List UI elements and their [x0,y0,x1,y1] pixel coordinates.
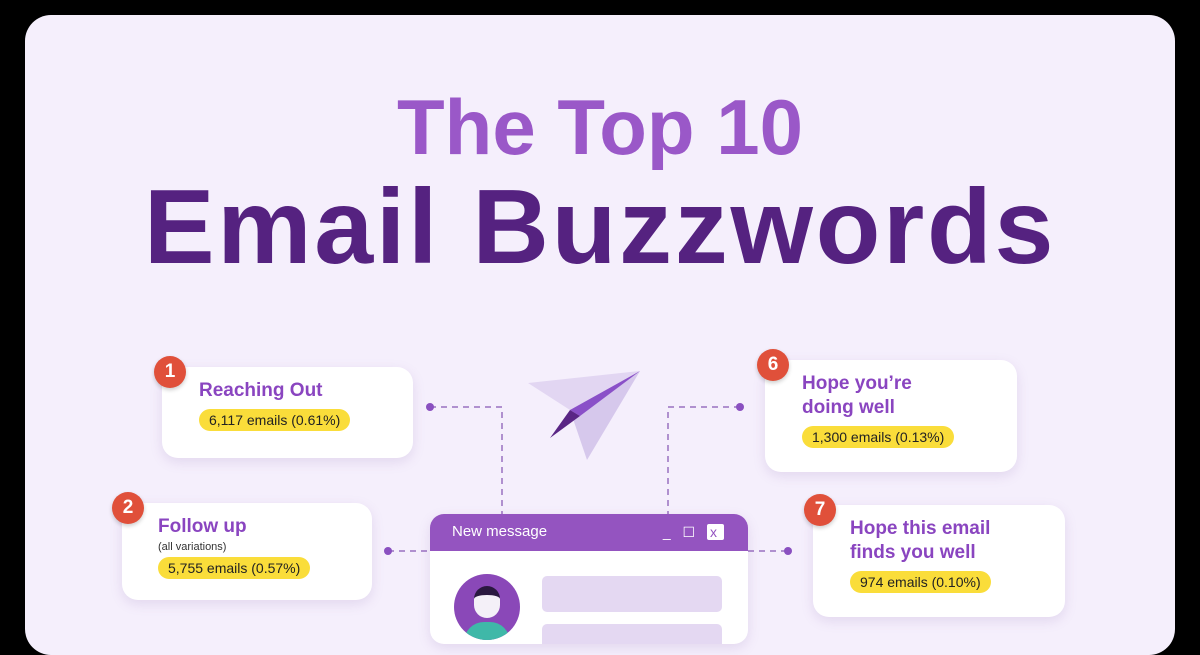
new message window: _ ☐ x [663,524,721,540]
item 7: Hope this email [850,518,990,539]
item 1: Reaching Out [199,380,323,401]
item 2: (all variations) [158,541,226,553]
item 6: 1,300 emails (0.13%) [812,429,944,445]
avatar [454,574,520,640]
badge 6: 6 [768,354,778,375]
item 2: 5,755 emails (0.57%) [168,560,300,576]
item 6: Hope you’re [802,373,912,394]
item 6: doing well [802,397,895,418]
badge 1 [154,356,186,388]
item 7 [813,505,1065,617]
badge 1: 1 [165,361,175,382]
badge 7 [804,494,836,526]
title line 1: The Top 10 [397,83,803,171]
item 1 [162,367,413,458]
badge 6 [757,349,789,381]
new message window: New message [452,523,547,540]
item 2 [122,503,372,600]
badge 2 [112,492,144,524]
item 2: Follow up [158,516,247,537]
title line 2: Email Buzzwords [144,168,1056,286]
item 1: 6,117 emails (0.61%) [209,412,340,428]
badge 7: 7 [815,499,825,520]
badge 2: 2 [123,497,133,518]
item 7: 974 emails (0.10%) [860,574,981,590]
icon: paper plane [528,371,640,460]
item 6 [765,360,1017,472]
item 7: finds you well [850,542,976,563]
new message window [430,514,748,644]
